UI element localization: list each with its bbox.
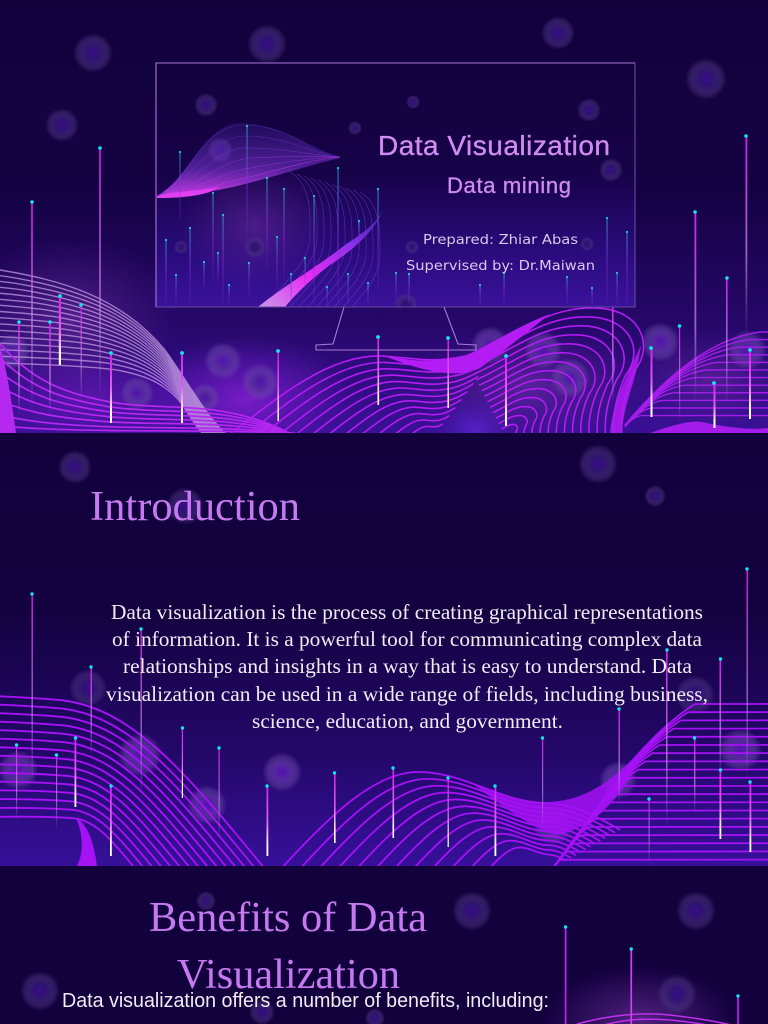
wave: right ribbon (625, 330, 768, 433)
paragraph: benefits intro: Data visualization offers a number of benefits, including: (62, 990, 549, 1012)
paragraph: introduction body: science, education, and government. (252, 709, 563, 733)
paragraph: introduction body: Data visualization is the process of creating graphical representations (111, 600, 703, 624)
paragraph: introduction body: of information. It is a powerful tool for communicating complex data (112, 627, 703, 651)
slide dividers (0, 433, 768, 867)
heading: Benefits of Data Visualization: Visualization (177, 952, 400, 998)
slide 3 light pins (564, 925, 740, 1024)
screen pins (165, 125, 628, 305)
slide 2 light pins (15, 567, 752, 865)
slide 1 background (0, 0, 768, 433)
wave: slide 2 left ribbon (0, 694, 265, 869)
paragraph: introduction body: visualization can be used in a wide range of fields, including business, (106, 682, 708, 706)
monitor stand (316, 307, 476, 350)
paragraph: introduction body (106, 600, 708, 733)
screen bokeh and glow (174, 93, 623, 317)
screen frame (156, 63, 635, 307)
slide 1 bokeh dots (0, 16, 767, 413)
slide 2 background (0, 433, 768, 866)
monitor screen (156, 63, 635, 329)
title: Data Visualization: Data Visualization (378, 130, 610, 161)
heading: Benefits of Data Visualization: Benefits of Data (149, 895, 427, 941)
wave: central magenta ribbon, right fan (384, 308, 644, 436)
screen wave: upper wing (157, 123, 340, 198)
slide 3 bokeh dots and glow (20, 891, 740, 1024)
wave: slide 2 right ribbon (553, 696, 768, 868)
screen wave: lower swirl (258, 172, 383, 306)
slide 1 soft glows (0, 253, 765, 433)
wave: pale ribbon left (0, 269, 226, 433)
paragraph: introduction body: relationships and insights in a way that is easy to understand. Data (123, 654, 693, 678)
slide 3 background (0, 866, 768, 1024)
heading: Introduction: Introduction (90, 484, 300, 530)
wave: slide 2 central ribbon (280, 745, 645, 870)
subtitle: Data mining: Data mining (447, 173, 571, 198)
wave: slide 3 ribbon (577, 1014, 735, 1024)
heading: Benefits of Data Visualization (149, 895, 427, 998)
slide 2 bokeh dots (0, 444, 762, 845)
supervisor line: Supervised by: Dr.Maiwan (406, 259, 595, 274)
author line: Prepared: Zhiar Abas (423, 233, 578, 248)
slide 1 light pins (17, 134, 752, 428)
wave: central magenta ribbon, left fan (230, 353, 478, 433)
wave: magenta ribbon left (0, 338, 295, 436)
